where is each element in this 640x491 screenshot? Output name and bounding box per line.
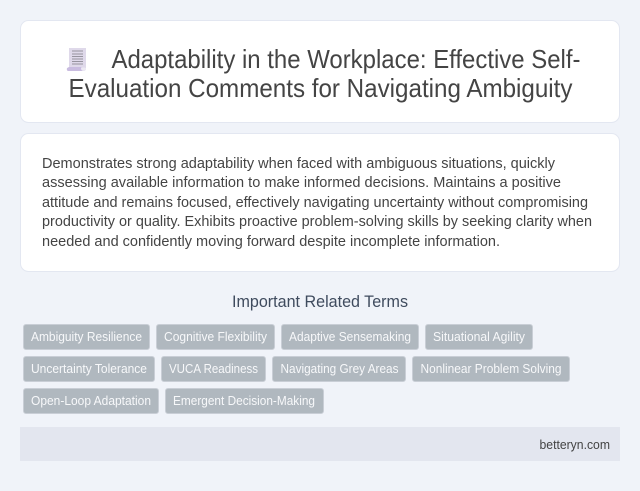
footer source: betteryn.com — [540, 438, 610, 452]
tag: VUCA Readiness — [162, 356, 266, 382]
title — [68, 44, 580, 103]
tag: Emergent Decision-Making — [166, 388, 324, 414]
tag: Ambiguity Resilience — [24, 324, 150, 350]
panel: summary card — [20, 134, 620, 272]
tag: Navigating Grey Areas: Navigating Grey Areas — [280, 362, 398, 376]
text block: summary: attitude and remains focused, effectively navigating uncertainty without compromising — [42, 195, 588, 211]
tag: Navigating Grey Areas — [272, 356, 406, 382]
heading: related terms: Important Related Terms — [232, 293, 408, 311]
text block: summary — [42, 156, 592, 250]
tag: Ambiguity Resilience: Ambiguity Resilience — [31, 330, 142, 344]
panel: title card — [20, 20, 620, 122]
icon: document scroll — [67, 48, 86, 71]
tag: Adaptive Sensemaking — [282, 324, 418, 350]
tag: Cognitive Flexibility: Cognitive Flexibility — [164, 330, 268, 344]
tag: Situational Agility: Situational Agility — [433, 330, 526, 344]
tag: Cognitive Flexibility — [156, 324, 274, 350]
tag: Uncertainty Tolerance: Uncertainty Tolerance — [31, 362, 147, 376]
tag: Nonlinear Problem Solving — [412, 356, 570, 382]
tag: Uncertainty Tolerance — [24, 356, 154, 382]
title: Evaluation Comments for Navigating Ambiguity — [68, 73, 572, 103]
text block: summary: assessing available information to make informed decisions. Maintains a positive — [42, 175, 561, 191]
text block: summary: productivity or quality. Exhibits proactive problem-solving skills by seeking clarity when — [42, 214, 592, 230]
title: Adaptability in the Workplace: Effective Self- — [112, 44, 580, 74]
text block: summary: needed and confidently moving forward despite incomplete information. — [42, 234, 500, 250]
tag: VUCA Readiness: VUCA Readiness — [169, 362, 258, 376]
tag: Emergent Decision-Making: Emergent Decision-Making — [173, 394, 315, 408]
tag: Nonlinear Problem Solving: Nonlinear Problem Solving — [420, 362, 562, 376]
tag: Situational Agility — [426, 324, 532, 350]
text block: summary: Demonstrates strong adaptability when faced with ambiguous situations, quickly — [42, 156, 556, 172]
tag: Adaptive Sensemaking: Adaptive Sensemaking — [289, 330, 411, 344]
footer bar — [20, 427, 620, 461]
tag list — [24, 324, 570, 414]
tag: Open-Loop Adaptation: Open-Loop Adaptation — [31, 394, 151, 408]
tag: Open-Loop Adaptation — [24, 388, 158, 414]
